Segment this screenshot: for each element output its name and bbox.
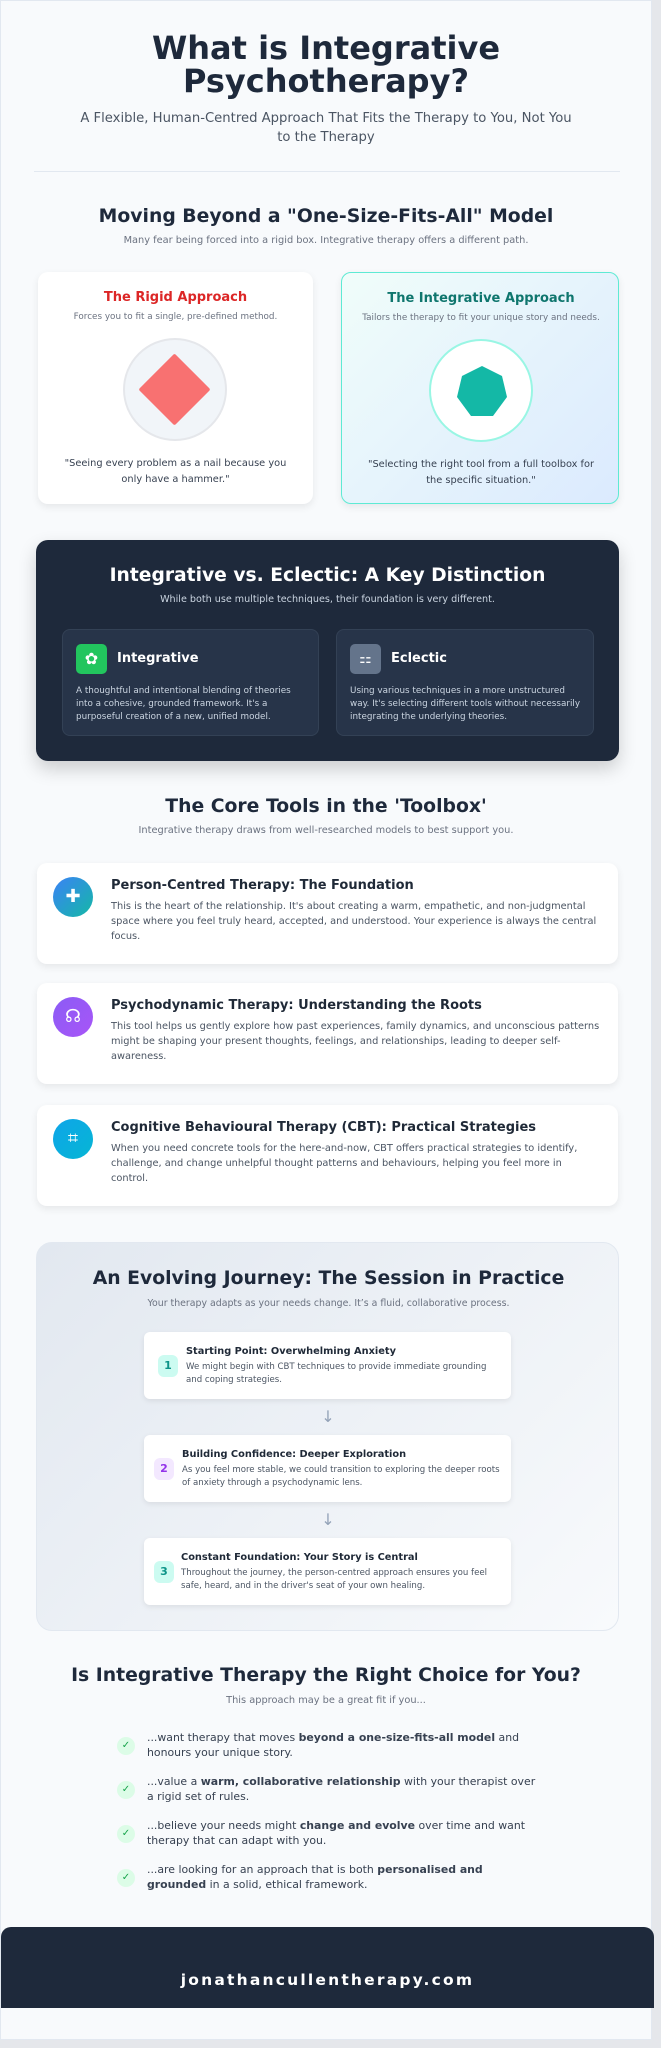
icon: grid gray — [350, 644, 381, 674]
checklist: ...believe your needs might change and evolve over time and want therapy that can adapt with you. — [147, 1819, 525, 1847]
icon: ⌗ — [68, 1128, 78, 1149]
checklist: ✓ — [122, 1784, 130, 1795]
body: This tool helps us gently explore how past experiences, family dynamics, and unconscious patterns might be shaping your present thoughts, feelings, and relationships, leading to deeper self-awareness. — [111, 1021, 599, 1062]
step 3: Constant Foundation: Your Story is Central — [181, 1552, 418, 1563]
box: integrative — [62, 629, 319, 736]
panel: integrative approach — [341, 272, 619, 504]
subheading: This approach may be a great fit if you... — [226, 1695, 426, 1706]
icon: grid gray: ⚏ — [359, 651, 372, 667]
arrow: ↓ — [321, 1407, 335, 1426]
checklist: a rigid set of rules. — [147, 1790, 249, 1803]
title: Psychotherapy? — [183, 62, 469, 100]
heading: one size fits all: Moving Beyond a "One-Size-Fits-All" Model — [99, 206, 553, 227]
title: Eclectic — [391, 651, 447, 666]
heading: An Evolving Journey: The Session in Practice — [93, 1268, 564, 1289]
step 1: Starting Point: Overwhelming Anxiety — [186, 1346, 396, 1357]
subheading: Many fear being forced into a rigid box. Integrative therapy offers a different path. — [124, 235, 528, 246]
subtitle: to the Therapy — [277, 130, 375, 145]
checklist: ✓ — [122, 1740, 130, 1751]
panel: evolving journey — [36, 1242, 619, 1631]
title: Psychodynamic Therapy: Understanding the Roots — [111, 998, 482, 1013]
checklist: ✓ — [122, 1872, 130, 1883]
title: Cognitive Behavioural Therapy (CBT): Practical Strategies — [111, 1120, 536, 1135]
step 2: As you feel more stable, we could transition to exploring the deeper roots of anxiety through a psychodynamic lens. — [182, 1465, 500, 1488]
icon: heptagon in circle — [429, 339, 533, 442]
title: Person-Centred Therapy: The Foundation — [111, 878, 414, 893]
checklist: ✓ — [122, 1828, 130, 1839]
subtitle — [80, 111, 572, 145]
step 1: We might begin with CBT techniques to provide immediate grounding — [186, 1362, 486, 1372]
title: Integrative — [117, 651, 199, 666]
step 3: 3 — [160, 1565, 168, 1578]
body: Using various techniques in a more unstructured way. It's selecting different tools without necessarily integrating the underlying theories. — [350, 686, 580, 722]
icon: puzzle green: ✿ — [85, 649, 98, 668]
sub: Your therapy adapts as your needs change. It’s a fluid, collaborative process. — [148, 1298, 509, 1309]
heading: Integrative vs. Eclectic: A Key Distinction — [110, 565, 545, 586]
body: When you need concrete tools for the here-and-now, CBT offers practical strategies to identify, challenge, and change unhelpful thought patterns and behaviours, helping you feel more in — [111, 1143, 577, 1169]
subtitle: A Flexible, Human-Centred Approach That Fits the Therapy to You, Not You — [80, 111, 572, 126]
checklist: ...are looking for an approach that is both personalised and grounded in a solid, ethical framework. — [147, 1863, 483, 1891]
icon: puzzle green — [76, 644, 107, 674]
integrative quote: "Selecting the right tool from a full toolbox for the specific situation." — [368, 459, 594, 486]
checklist: ...want therapy that moves beyond a one-size-fits-all model and honours your unique story. — [147, 1731, 519, 1759]
heading: core tools: The Core Tools in the 'Toolbox' — [165, 796, 487, 817]
footer: jonathancullentherapy.com — [181, 1971, 474, 1989]
icon — [53, 997, 93, 1037]
step 1: 1 — [164, 1359, 172, 1372]
body — [111, 1143, 577, 1184]
step 2: Building Confidence: Deeper Exploration — [182, 1449, 406, 1460]
panel: rigid approach — [38, 272, 313, 504]
rigid quote: "Seeing every problem as a nail because you only have a hammer." — [65, 458, 286, 484]
integrative title: The Integrative Approach — [387, 291, 575, 306]
subheading: Integrative therapy draws from well-researched models to best support you. — [139, 825, 513, 836]
integrative sub: Tailors the therapy to fit your unique story and needs. — [362, 313, 600, 323]
arrow: ↓ — [321, 1510, 335, 1529]
body: This is the heart of the relationship. It's about creating a warm, empathetic, and non-judgmental space where you feel truly heard, accepted, and understood. Your experience is always the central focus. — [111, 901, 596, 942]
checklist — [117, 1731, 536, 1891]
icon: ☊ — [65, 1006, 81, 1027]
step 3 — [144, 1538, 511, 1605]
rigid sub: Forces you to fit a single, pre-defined method. — [74, 312, 277, 322]
rigid title: The Rigid Approach — [104, 290, 247, 305]
tool: psychodynamic — [37, 983, 618, 1084]
checklist: ...value a warm, collaborative relationship with your therapist over — [147, 1775, 535, 1788]
icon — [53, 1119, 93, 1159]
step 3: Throughout the journey, the person-centred approach ensures you feel safe, heard, and in the driver's seat of your own healing. — [181, 1568, 487, 1591]
title: What is Integrative — [152, 29, 500, 67]
tool: person-centred — [37, 863, 618, 964]
step 1: and coping strategies. — [186, 1375, 282, 1385]
body: A thoughtful and intentional blending of theories into a cohesive, grounded framework. It's a purposeful creation of a new, unified model. — [76, 686, 291, 722]
box: eclectic — [336, 629, 594, 736]
icon: diamond in circle — [123, 338, 227, 441]
panel: integrative vs eclectic — [36, 540, 619, 761]
step 1 — [144, 1332, 511, 1399]
icon: ✚ — [65, 886, 81, 907]
heading: right choice: Is Integrative Therapy the Right Choice for You? — [71, 1665, 581, 1686]
sub: While both use multiple techniques, their foundation is very different. — [160, 594, 495, 605]
step 2: 2 — [160, 1462, 168, 1475]
title — [152, 29, 500, 100]
icon — [53, 877, 93, 917]
step 2 — [144, 1435, 511, 1502]
footer — [1, 1927, 654, 2008]
tool: cbt — [37, 1105, 618, 1206]
body: control. — [111, 1173, 148, 1184]
